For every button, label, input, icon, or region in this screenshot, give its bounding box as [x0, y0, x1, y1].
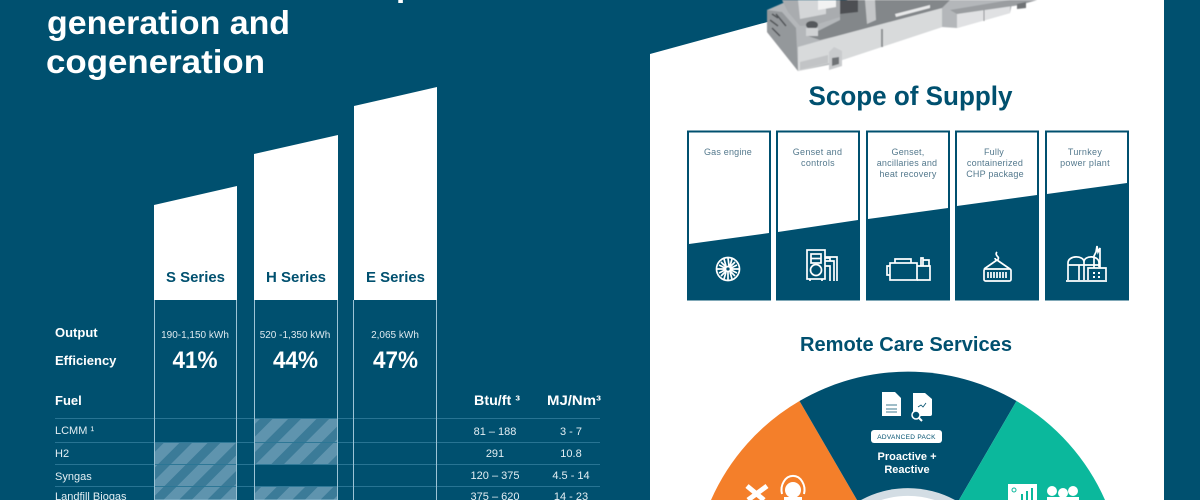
icon: turbine	[716, 258, 740, 280]
bar: S Series	[154, 186, 237, 300]
image: gas engine	[767, 0, 1037, 71]
card: Turnkey power plant: Turnkey	[1068, 147, 1102, 157]
wheel segment: navy advanced pack	[800, 372, 1016, 500]
row labels: Fuel	[55, 393, 82, 408]
icon: genset controller	[807, 250, 837, 281]
column outlines	[154, 300, 436, 500]
output and efficiency values: 520 -1,350 kWh	[260, 330, 330, 341]
card: Fully containerized CHP package: Fully	[984, 147, 1004, 157]
card: Genset, ancillaries and heat recovery: ancillaries and	[877, 158, 937, 168]
output and efficiency values: 41%	[172, 347, 218, 374]
icon: tools and headset	[747, 476, 805, 500]
row labels: Efficiency	[55, 353, 117, 368]
card: Turnkey power plant	[1045, 130, 1129, 300]
card: Turnkey power plant: power plant	[1060, 158, 1110, 168]
wheel segment: orange	[711, 401, 857, 500]
card: Genset, ancillaries and heat recovery: heat recovery	[879, 169, 937, 179]
fuel table text	[55, 392, 601, 500]
row labels	[55, 325, 117, 408]
icon: power plant	[1066, 246, 1107, 281]
fuel table text: LCMM ¹	[55, 425, 94, 437]
fuel table text: 3 - 7	[560, 426, 582, 438]
hatched fuel availability cells	[154, 418, 338, 500]
fuel table text: MJ/Nm³	[547, 392, 601, 408]
card: Genset and controls	[776, 130, 860, 300]
bar: E Series	[354, 87, 437, 300]
label: proactive and reactive	[877, 451, 937, 476]
inner ring	[861, 488, 955, 500]
icon: container on hook	[984, 252, 1011, 281]
icon: documents	[882, 392, 932, 421]
label: proactive and reactive: Proactive +	[877, 451, 937, 463]
badge: advanced pack	[871, 430, 942, 443]
title	[46, 0, 416, 80]
output and efficiency values	[161, 330, 419, 374]
fuel table text: Btu/ft ³	[474, 392, 520, 408]
icon: CHP unit	[887, 258, 930, 280]
table row lines	[55, 418, 600, 486]
card: Fully containerized CHP package: CHP package	[966, 169, 1024, 179]
fuel table text: 4.5 - 14	[552, 470, 590, 482]
fuel table text: H2	[55, 448, 69, 460]
bar: S Series: S Series	[166, 270, 225, 286]
wheel segment: teal	[959, 401, 1105, 500]
panel: white right panel	[650, 0, 1164, 500]
output and efficiency values: 47%	[373, 347, 418, 374]
fuel table text: Syngas	[55, 471, 92, 483]
icon: analytics and people	[1008, 484, 1079, 500]
chart: engine series bars	[55, 87, 600, 500]
title: cogeneration	[46, 43, 265, 80]
card: Fully containerized CHP package	[955, 130, 1039, 300]
heading: Remote Care Services: Remote Care Services	[800, 334, 1012, 356]
fuel table text: 10.8	[560, 448, 582, 460]
card: Gas engine: Gas engine	[704, 147, 752, 157]
bar: H Series: H Series	[266, 270, 326, 286]
fuel table text: 291	[486, 448, 504, 460]
heading: Scope of Supply: Scope of Supply	[808, 81, 1012, 111]
card: Genset, ancillaries and heat recovery: Genset,	[892, 147, 924, 157]
fuel table text: 120 – 375	[471, 470, 519, 482]
fuel table text: 81 – 188	[474, 426, 516, 438]
output and efficiency values: 2,065 kWh	[371, 330, 419, 341]
output and efficiency values: 190-1,150 kWh	[161, 330, 229, 341]
inner white disc	[881, 496, 935, 500]
bar: E Series: E Series	[366, 270, 425, 286]
card: Fully containerized CHP package: containerized	[967, 158, 1023, 168]
label: proactive and reactive: Reactive	[884, 464, 930, 476]
row labels: Output	[55, 325, 98, 340]
card: Gas engine	[687, 130, 771, 300]
badge: advanced pack: ADVANCED PACK	[877, 434, 936, 441]
title: generation and	[47, 4, 290, 41]
bar: H Series	[254, 135, 338, 300]
card: Genset, ancillaries and heat recovery	[866, 130, 950, 300]
card: Genset and controls: Genset and	[793, 147, 842, 157]
chart: remote care service wheel	[711, 372, 1105, 500]
card: Genset and controls: controls	[801, 158, 835, 168]
output and efficiency values: 44%	[273, 347, 318, 374]
